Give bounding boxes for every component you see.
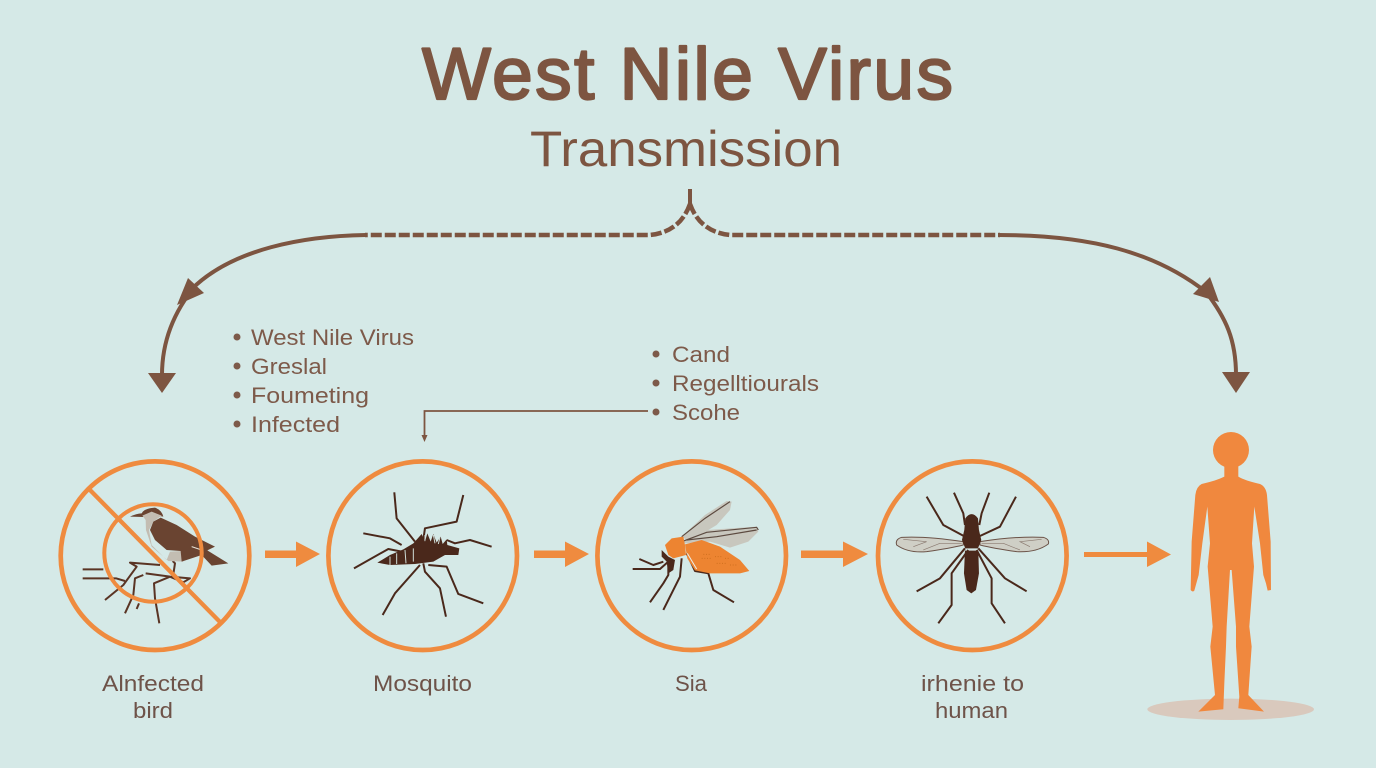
icon: spider-like mosquito in circle [328, 461, 517, 650]
arrow: connector from list to mosquito [422, 411, 648, 442]
icon: side-view orange mosquito in circle [597, 461, 786, 650]
icon: top-view mosquito in circle [878, 461, 1067, 650]
label: to human: human [935, 698, 1008, 723]
bird on branch [83, 508, 228, 623]
flow arrow: bird to mosquito [265, 542, 320, 567]
bullet list: left: Infected [251, 412, 340, 437]
label: sia: Sia [675, 671, 708, 696]
flow arrow: mosquito to side-view mosquito [534, 542, 589, 567]
icon: infected bird in crossed circle [61, 461, 249, 650]
bullet list: right: Cand [672, 342, 730, 367]
bullet list: right: Scohe [672, 400, 740, 425]
label: infected bird: bird [133, 698, 173, 723]
bullet list: left: West Nile Virus [251, 325, 414, 350]
bullet list: left [234, 325, 414, 437]
subtitle: Transmission [530, 121, 842, 177]
label: to human [921, 671, 1024, 723]
arrow: branching cycle arc [148, 189, 1250, 393]
flow arrow: mosquito to human [1084, 542, 1171, 567]
label: infected bird: Alnfected [102, 671, 204, 696]
bullet list: left: Greslal [251, 354, 327, 379]
title: West Nile Virus [422, 34, 953, 115]
bullet list: right: Regelltiourals [672, 371, 819, 396]
flow arrow: side-view to top-view mosquito [801, 542, 868, 567]
bullet list: right [652, 342, 819, 425]
bullet list: left: Foumeting [251, 383, 369, 408]
label: mosquito: Mosquito [373, 671, 472, 696]
label: to human: irhenie to [921, 671, 1024, 696]
label: infected bird [102, 671, 204, 723]
icon: human figure with ground shadow [1147, 432, 1314, 720]
